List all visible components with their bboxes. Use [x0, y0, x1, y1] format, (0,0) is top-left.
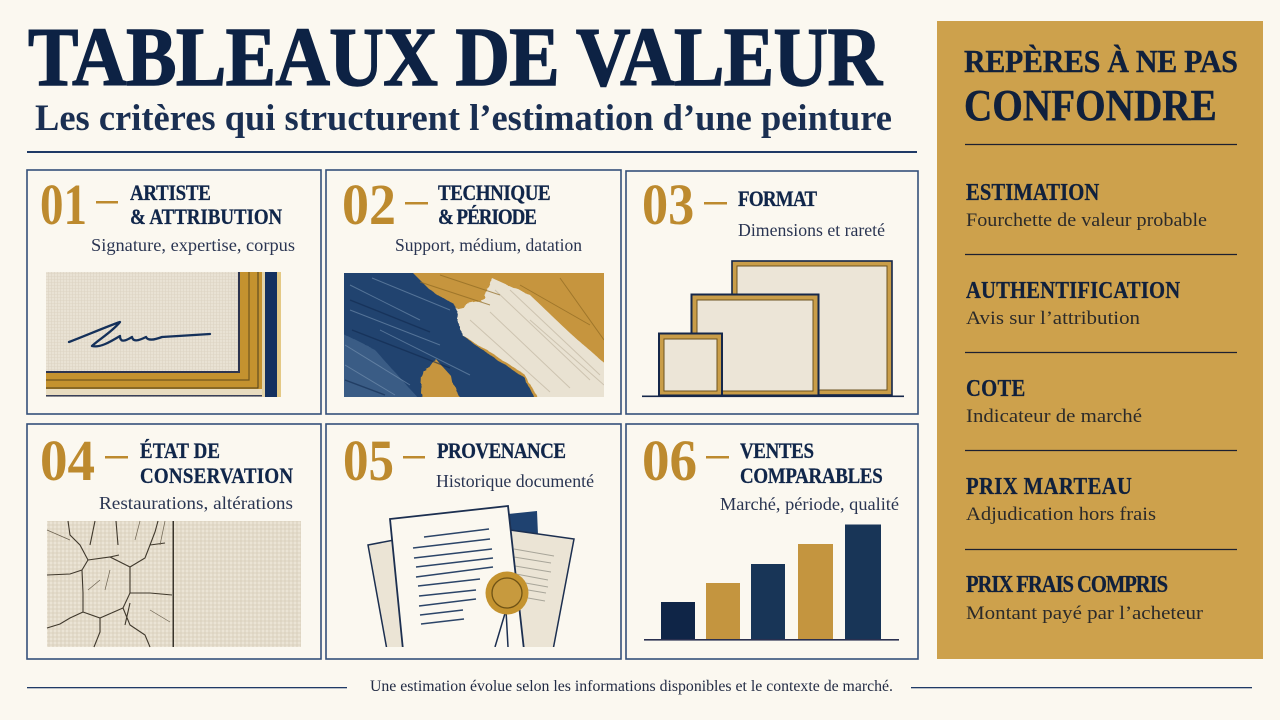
term: authentification [966, 277, 1180, 329]
term: prix marteau [966, 473, 1156, 525]
ribbons [495, 610, 508, 647]
panel heading: REPÈRES À NE PAS [964, 43, 1238, 79]
description 04: Restaurations, altérations [99, 493, 293, 513]
illustration: signature on framed canvas [46, 272, 281, 397]
subtitle: Les critères qui structurent l’estimation d’une peinture [35, 98, 892, 139]
panel: 01 artiste et attribution: & ATTRIBUTION [130, 206, 282, 229]
heading 04: ÉTAT DE [140, 439, 220, 463]
number 03: 03 [642, 172, 694, 237]
term: prix frais compris [966, 571, 1204, 624]
term: cote [966, 375, 1142, 427]
heading 06: VENTES [740, 440, 814, 463]
description 05: Historique documenté [436, 471, 594, 491]
panel: 02 technique et période: & PÉRIODE [438, 205, 537, 229]
panel: 04 état de conservation: CONSERVATION [140, 465, 293, 488]
term: prix frais compris: PRIX FRAIS COMPRIS [966, 571, 1168, 597]
navy folder [510, 511, 538, 534]
number 05: 05 [343, 428, 394, 493]
illustration: documents with wax seal [368, 506, 574, 650]
number 04: 04 [40, 430, 95, 493]
description 01: Signature, expertise, corpus [91, 235, 295, 255]
panel: 04 état de conservation [27, 424, 321, 659]
term: estimation: ESTIMATION [966, 179, 1099, 205]
medium frame [692, 294, 818, 396]
left document [368, 540, 404, 650]
panel: 03 format [626, 171, 918, 414]
panel: 05 provenance [326, 424, 621, 659]
description 03: Dimensions et rareté [738, 220, 885, 240]
illustration: cracked and restored canvas [47, 521, 301, 647]
term: authentification: Avis sur l’attribution [966, 308, 1141, 329]
large frame [732, 261, 892, 395]
heading 03: FORMAT [738, 188, 817, 211]
term: estimation [966, 179, 1207, 231]
illustration: three frames by size [642, 261, 904, 397]
right document [510, 530, 574, 650]
panel: 06 ventes comparables [626, 424, 918, 659]
heading 05: PROVENANCE [437, 440, 566, 463]
heading 01: ARTISTE [130, 182, 211, 205]
bar chart [644, 524, 899, 641]
term: authentification: AUTHENTIFICATION [966, 277, 1180, 303]
panel: 01 artiste et attribution [27, 170, 321, 414]
panel: 02 technique et période [326, 170, 621, 414]
panel: repères à ne pas confondre [937, 21, 1263, 659]
number 06: 06 [642, 430, 697, 493]
number 02: 02 [342, 173, 396, 237]
signature stroke [69, 322, 210, 346]
term: prix marteau: PRIX MARTEAU [966, 473, 1132, 499]
title: TABLEAUX DE VALEUR [28, 11, 883, 104]
term: estimation: Fourchette de valeur probable [966, 210, 1207, 231]
number 01: 01 [40, 173, 87, 237]
small frame [659, 334, 722, 396]
panel heading: CONFONDRE [964, 82, 1217, 131]
term: cote: Indicateur de marché [966, 406, 1142, 427]
central document [390, 506, 524, 650]
term: prix marteau: Adjudication hors frais [966, 504, 1156, 525]
description 02: Support, médium, datation [395, 235, 582, 255]
wax seal [486, 572, 528, 614]
footer note: Une estimation évolue selon les informations disponibles et le contexte de marché. [370, 678, 893, 695]
description 06: Marché, période, qualité [720, 494, 899, 514]
term: prix frais compris: Montant payé par l’acheteur [966, 603, 1204, 624]
heading 02: TECHNIQUE [438, 182, 551, 205]
panel: 06 ventes comparables: COMPARABLES [740, 465, 883, 488]
panel heading [964, 43, 1238, 131]
term: cote: COTE [966, 375, 1025, 401]
illustration: impasto paint strokes [344, 273, 604, 397]
